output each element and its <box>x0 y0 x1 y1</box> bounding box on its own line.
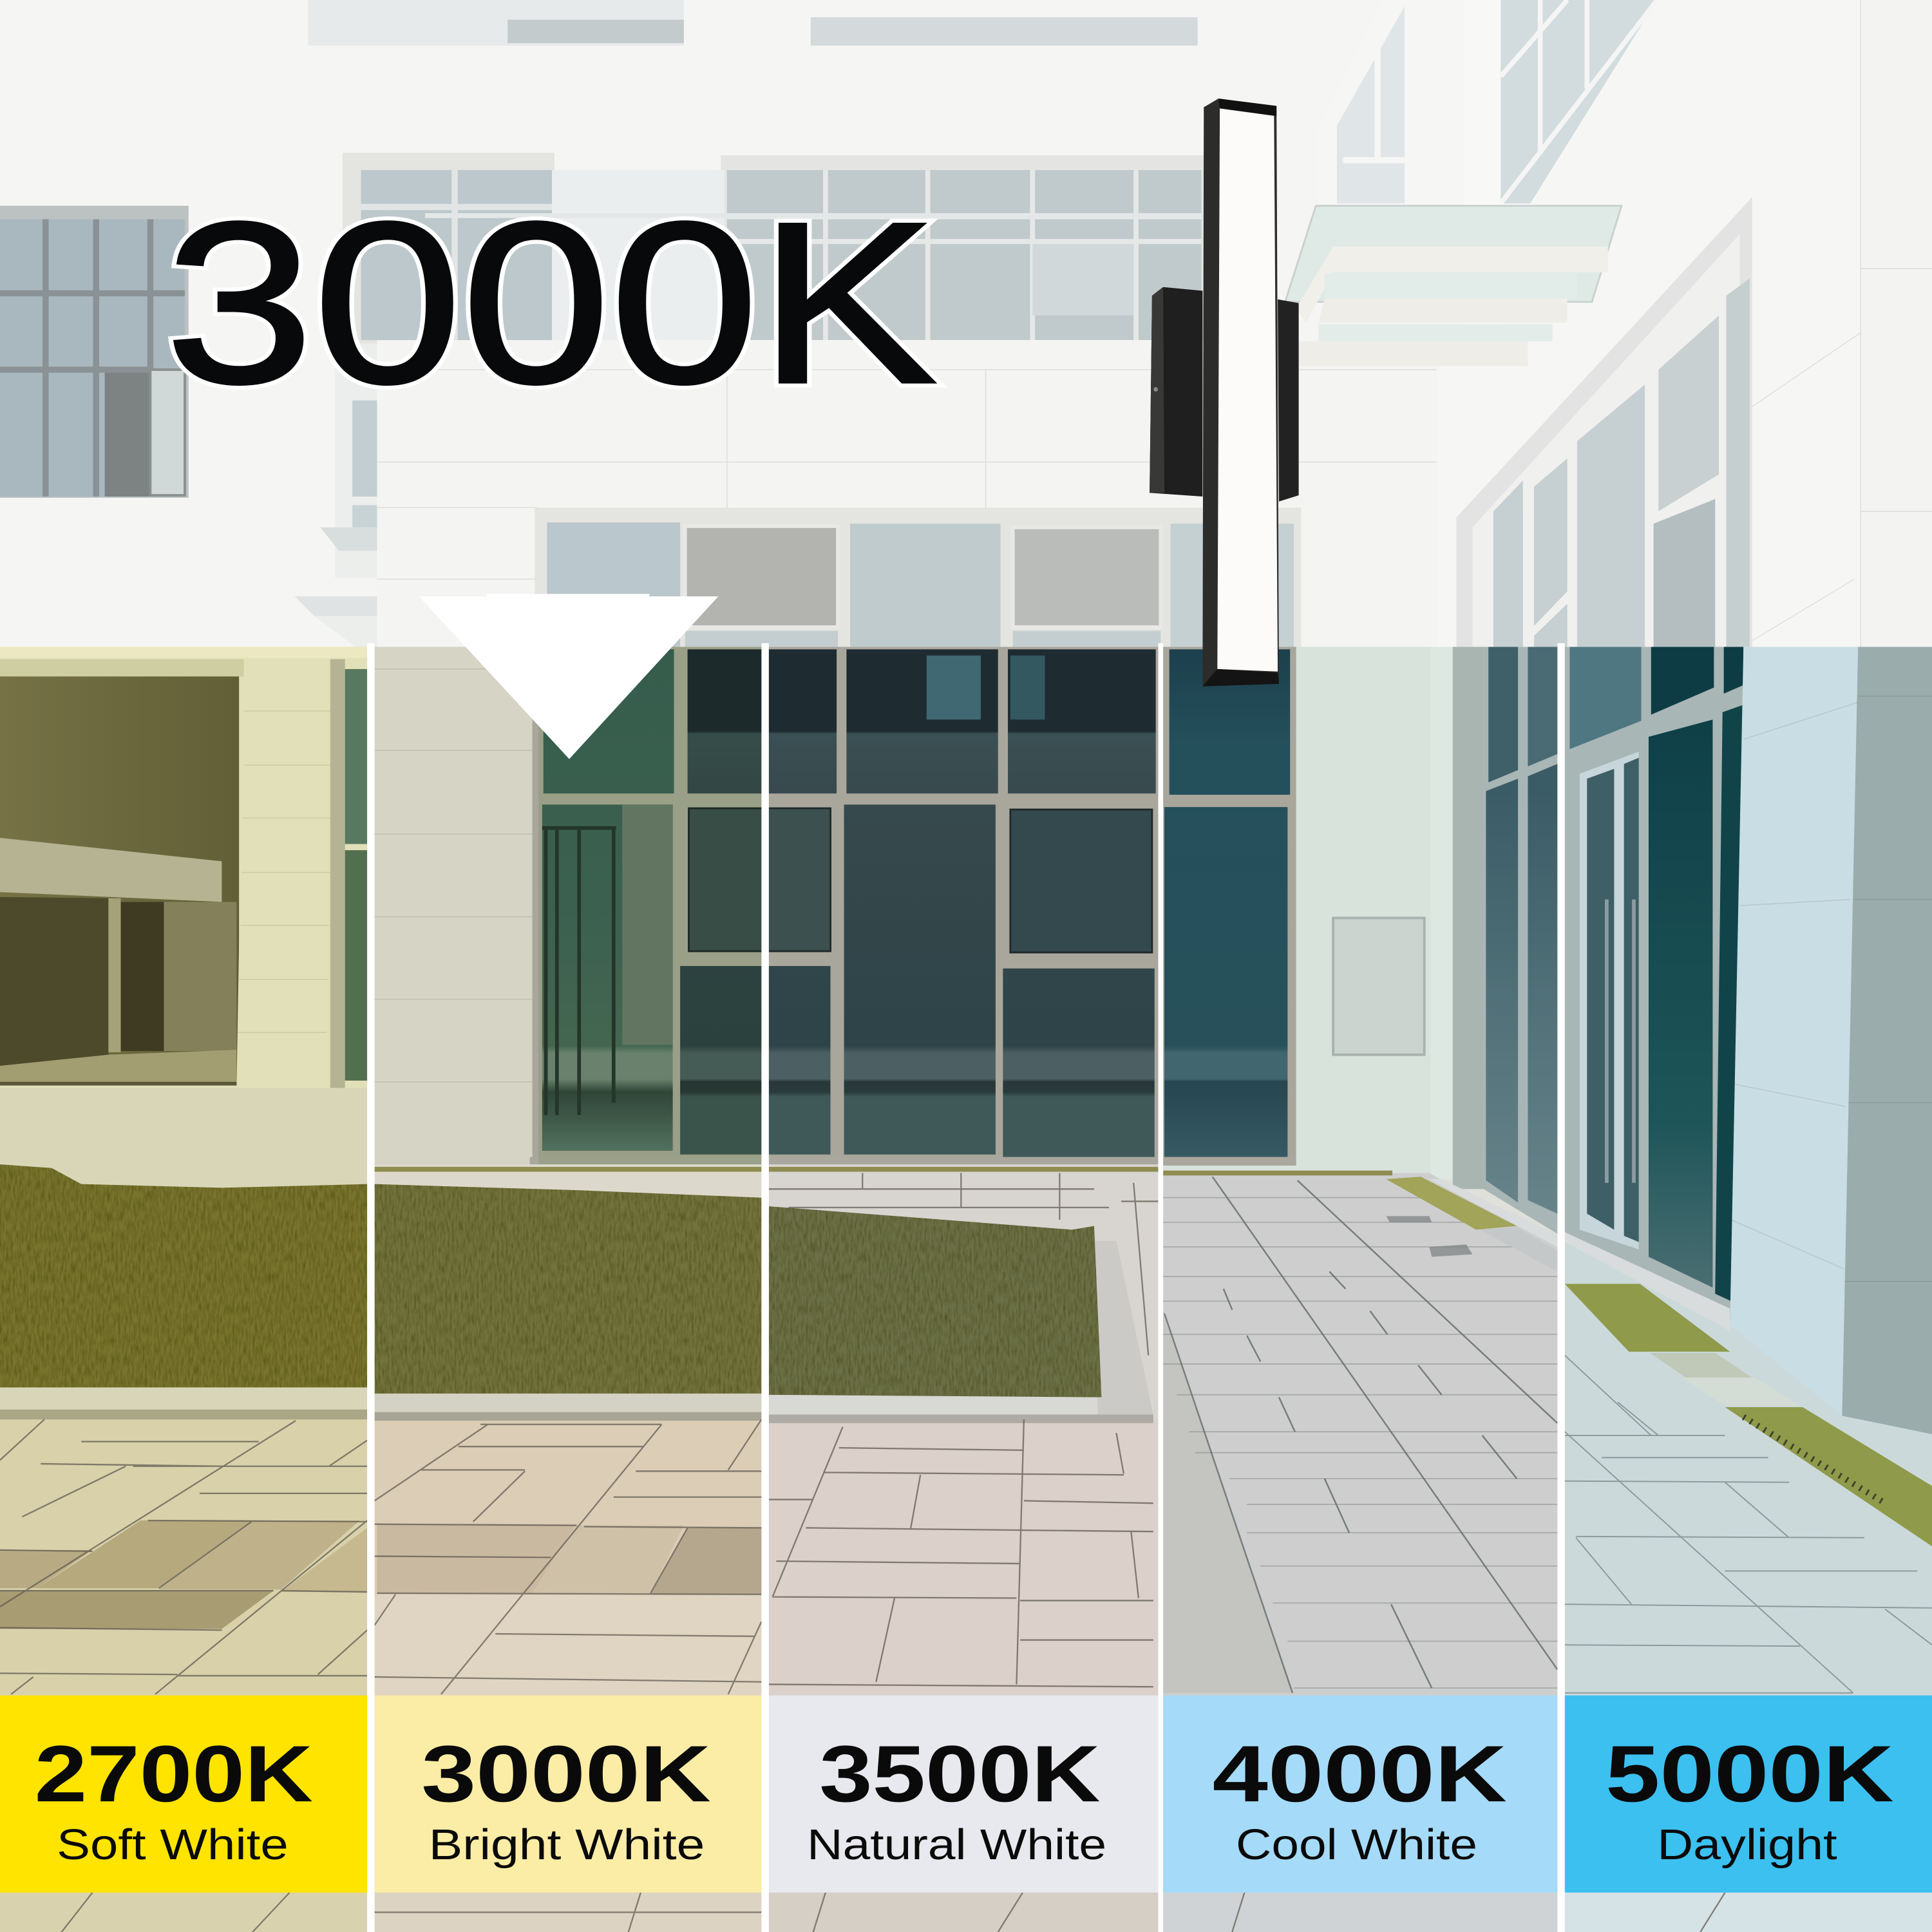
heading: selected temperature 3000K: 3000K <box>165 175 936 431</box>
panel: 5000K Daylight: 5000K <box>1605 1729 1894 1819</box>
lawn <box>0 1164 1101 1397</box>
panel: 5000K Daylight <box>1565 1696 1932 1893</box>
right wing glazing <box>1296 647 1932 1435</box>
left wing with recessed opening <box>0 647 367 1090</box>
lawn curb <box>0 1387 367 1410</box>
tile fields <box>0 1419 367 1696</box>
heading: selected temperature 3000K: 3000K <box>165 175 936 431</box>
column divider lines <box>367 643 1565 1932</box>
icon: wall light fixture <box>1150 99 1299 687</box>
panel: 2700K Soft White: Soft White <box>57 1821 289 1869</box>
panel: 4000K Cool White <box>1163 1696 1557 1893</box>
panel: 3500K Natural White <box>769 1696 1158 1893</box>
lower scene: building and courtyard in full colour <box>0 647 1932 1932</box>
panel: 2700K Soft White <box>0 1696 367 1893</box>
panel: 4000K Cool White: 4000K <box>1213 1729 1507 1819</box>
panel: 5000K Daylight: Daylight <box>1657 1821 1837 1869</box>
panel: 3500K Natural White: Natural White <box>807 1821 1106 1869</box>
drains <box>1386 1177 1517 1229</box>
tile joints right columns <box>1163 1198 1557 1688</box>
tile joints left columns <box>0 1419 367 1694</box>
glass canopy <box>1285 206 1622 302</box>
panel: 3000K Bright White: Bright White <box>429 1821 705 1869</box>
panel: 3000K Bright White <box>375 1696 761 1893</box>
courtyard paving <box>0 1088 1932 1932</box>
electrical box <box>1333 918 1425 1055</box>
strip below label band <box>0 1891 367 1932</box>
main facade <box>375 647 1434 1177</box>
drain strip <box>375 1167 1392 1175</box>
arrow: marker pointing at 3000K column <box>419 594 718 759</box>
panel: 2700K Soft White: 2700K <box>35 1729 313 1819</box>
panel: 3500K Natural White: 3500K <box>819 1729 1101 1819</box>
darker weathered tiles <box>37 1520 251 1588</box>
panel: 3000K Bright White: 3000K <box>421 1729 711 1819</box>
panel: 4000K Cool White: Cool White <box>1236 1821 1477 1869</box>
upper scene: whitewashed building <box>0 0 1932 648</box>
upper right building <box>1318 0 1932 648</box>
